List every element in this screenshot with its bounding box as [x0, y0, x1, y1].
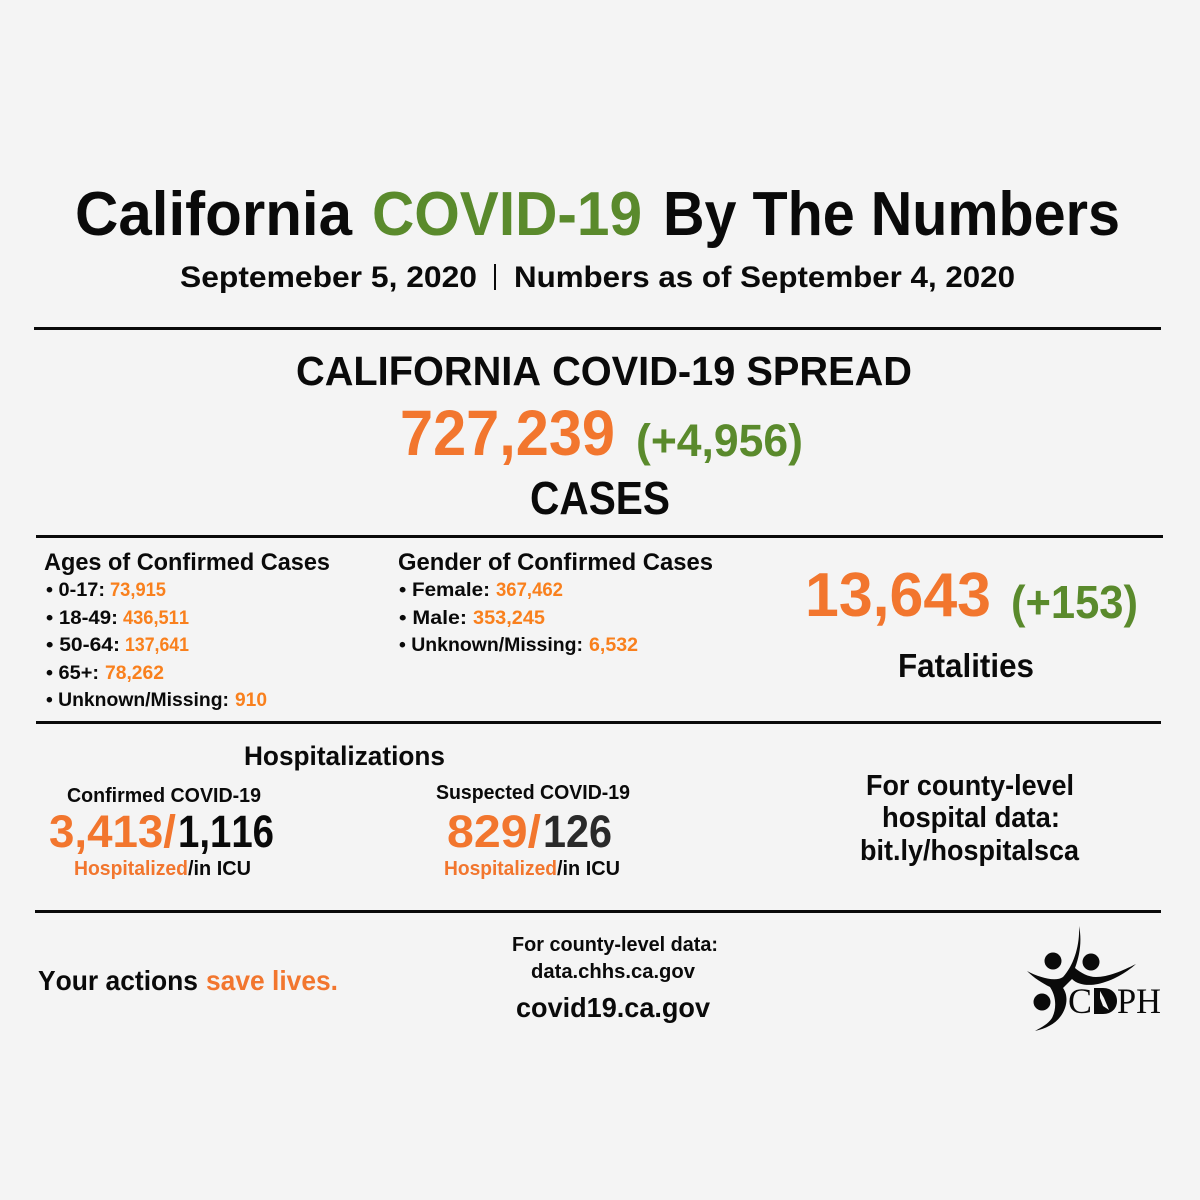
panel: ages of confirmed cases: • 0-17: [46, 580, 105, 601]
panel: gender of confirmed cases [398, 549, 713, 656]
heading: hospitalizations: Hospitalizations [244, 741, 445, 771]
panel: ages of confirmed cases: 78,262 [105, 663, 164, 684]
callout: county-level hospital data: hospital data: [882, 802, 1060, 834]
panel: suspected hospitalizations [436, 782, 630, 880]
total cases number: (+4,956) [636, 415, 803, 466]
tagline [38, 965, 338, 996]
panel: confirmed hospitalizations: 3,413/ [49, 806, 176, 857]
panel: gender of confirmed cases: 367,462 [496, 580, 563, 601]
county-level data links: covid19.ca.gov [516, 992, 710, 1023]
panel: fatalities: (+153) [1011, 576, 1138, 628]
label: cases: CASES [530, 472, 670, 524]
panel: confirmed hospitalizations [49, 785, 274, 880]
heading: California COVID-19 spread: CALIFORNIA COVID-19 SPREAD [296, 348, 912, 394]
icon: CDPH logo [1027, 926, 1161, 1031]
title: California [75, 180, 352, 249]
title [75, 180, 1120, 249]
panel: fatalities: Fatalities [898, 647, 1034, 684]
panel: ages of confirmed cases: 436,511 [123, 608, 189, 629]
panel: suspected hospitalizations: 126 [543, 806, 612, 857]
panel: fatalities [805, 561, 1138, 684]
subtitle: date: Septemeber 5, 2020 [180, 261, 477, 294]
panel: suspected hospitalizations: Hospitalized [444, 858, 557, 880]
panel: confirmed hospitalizations: Hospitalized [74, 858, 188, 880]
tagline: Your actions [38, 965, 198, 996]
total cases number: 727,239 [400, 397, 615, 469]
icon: CDPH logo: C [1068, 981, 1092, 1021]
panel: ages of confirmed cases: • 18-49: [46, 608, 118, 629]
panel: ages of confirmed cases: 73,915 [110, 580, 166, 601]
icon: CDPH logo: PH [1117, 981, 1161, 1021]
tagline: save lives. [206, 965, 338, 996]
subtitle: date [180, 261, 1015, 294]
panel: ages of confirmed cases: 137,641 [125, 635, 189, 656]
title: By The Numbers [663, 180, 1120, 249]
panel: ages of confirmed cases: • 65+: [46, 663, 99, 684]
county-level data links: For county-level data: [512, 934, 718, 956]
panel: gender of confirmed cases: Gender of Confirmed Cases [398, 549, 713, 576]
panel: gender of confirmed cases: 353,245 [473, 608, 545, 629]
panel: confirmed hospitalizations: Confirmed COVID-19 [67, 785, 261, 807]
subtitle: date: Numbers as of September 4, 2020 [514, 261, 1015, 294]
icon: CDPH logo: D [1094, 981, 1116, 1021]
panel: ages of confirmed cases [44, 549, 330, 711]
panel: fatalities: 13,643 [805, 561, 991, 630]
panel: ages of confirmed cases: Ages of Confirmed Cases [44, 549, 330, 576]
panel: suspected hospitalizations: 829/ [447, 806, 542, 857]
panel: suspected hospitalizations: Suspected COVID-19 [436, 782, 630, 804]
panel: ages of confirmed cases: • Unknown/Missing: [46, 690, 229, 711]
panel: confirmed hospitalizations: 1,116 [178, 806, 274, 857]
panel: gender of confirmed cases: • Male: [399, 608, 467, 629]
callout: county-level hospital data: bit.ly/hospitalsca [860, 835, 1080, 867]
panel: ages of confirmed cases: • 50-64: [46, 635, 120, 656]
total cases number [400, 397, 803, 469]
callout: county-level hospital data: For county-level [866, 770, 1074, 802]
county-level data links: data.chhs.ca.gov [531, 961, 696, 983]
panel: suspected hospitalizations: /in ICU [557, 858, 620, 880]
panel: confirmed hospitalizations: /in ICU [188, 858, 251, 880]
county-level data links [512, 934, 718, 1023]
panel: gender of confirmed cases: 6,532 [589, 635, 638, 656]
panel: gender of confirmed cases: • Unknown/Missing: [399, 635, 583, 656]
callout: county-level hospital data [860, 770, 1080, 867]
panel: gender of confirmed cases: • Female: [399, 580, 490, 601]
panel: ages of confirmed cases: 910 [235, 690, 267, 711]
title: COVID-19 [372, 180, 642, 249]
